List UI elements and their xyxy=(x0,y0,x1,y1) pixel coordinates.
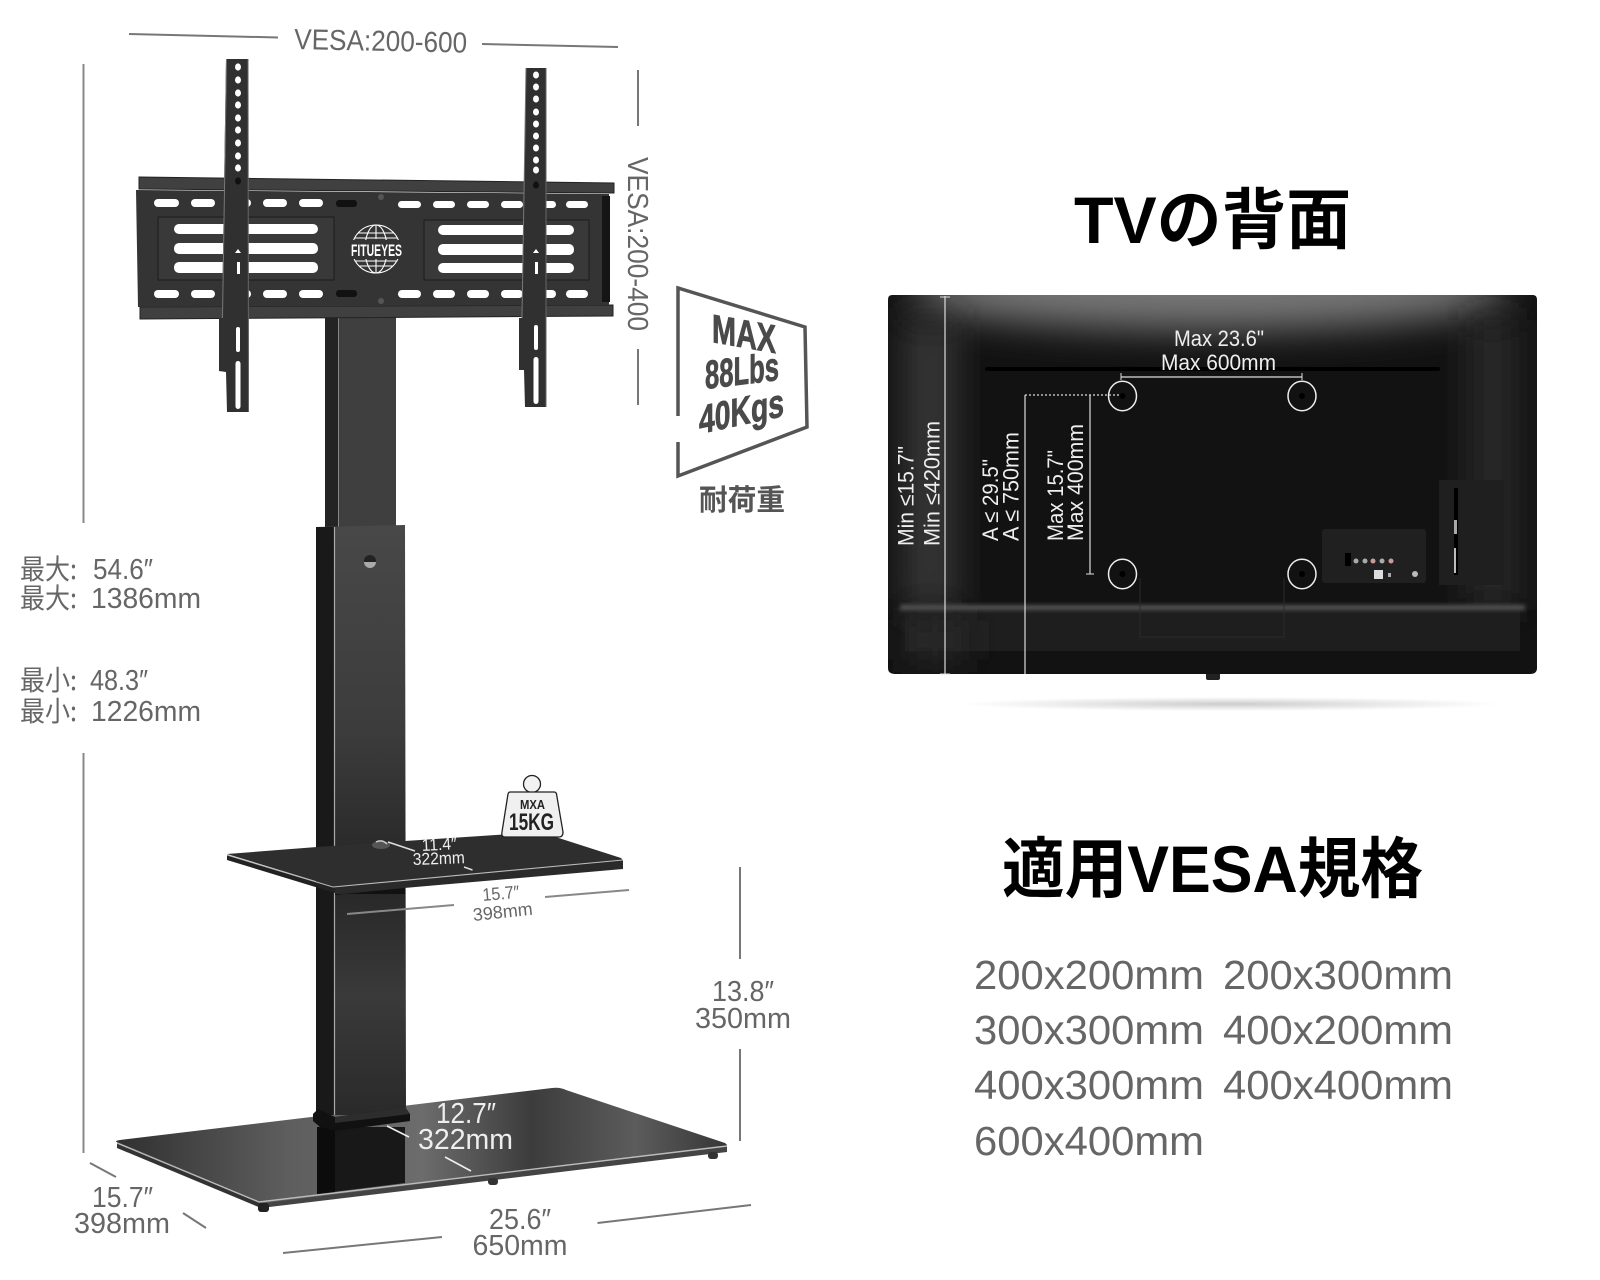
dimension: overall height: 1226mm xyxy=(91,696,201,728)
port panel xyxy=(1322,529,1426,583)
side connector panel xyxy=(1439,480,1504,585)
middle shelf xyxy=(227,832,623,895)
dimension: base side depth xyxy=(74,1163,206,1240)
shelf depth dimension xyxy=(388,834,472,870)
dimension: base to shelf height: 13.8″ xyxy=(712,976,774,1008)
distance to bottom edge A: A ≤ 29.5" xyxy=(978,459,1003,541)
VESA size list: 600x400mm xyxy=(974,1118,1204,1164)
TV mounting plate xyxy=(136,177,614,319)
distance to bottom edge A: A ≤ 750mm xyxy=(998,432,1024,541)
heading: back of TV: TVの背面 xyxy=(1074,167,1351,263)
VESA size list: 300x300mm xyxy=(974,1007,1204,1053)
dimension: overall height: 最大: xyxy=(20,548,77,588)
dimension: overall height: 54.6″ xyxy=(93,554,153,586)
dimension: base to shelf height xyxy=(695,867,791,1141)
VESA hole markers xyxy=(1108,381,1316,589)
VESA size list: 400x400mm xyxy=(1223,1062,1453,1108)
shelf depth dimension: 322mm xyxy=(412,848,465,869)
VESA size list: 200x200mm xyxy=(974,952,1204,998)
dimension: base width xyxy=(283,1204,751,1262)
dimension: top VESA width: VESA:200-600 xyxy=(294,24,467,60)
load capacity badge: 88Lbs xyxy=(705,344,779,398)
VESA size list: 200x300mm xyxy=(1223,952,1453,998)
shelf depth dimension: 11.4″ xyxy=(421,834,457,855)
FITUEYES logo: FITUEYES xyxy=(351,241,402,260)
dimension: base to shelf height: 350mm xyxy=(695,1003,791,1035)
VESA size list: 400x300mm xyxy=(974,1062,1204,1108)
vertical VESA max xyxy=(1043,395,1094,574)
dimension: base depth on glass: 12.7″ xyxy=(436,1098,496,1130)
dimension: overall height: 最大: xyxy=(20,577,77,617)
horizontal VESA max: Max 23.6" xyxy=(1174,326,1264,351)
shelf width dimension: 15.7″ xyxy=(482,882,521,905)
column reflection in glass xyxy=(317,1127,405,1194)
dimension: base width: 25.6″ xyxy=(489,1204,551,1236)
FITUEYES logo xyxy=(350,225,402,273)
dimension: overall height: 最小: xyxy=(20,690,77,730)
dimension: base side depth: 398mm xyxy=(74,1208,170,1240)
dimension: top VESA width xyxy=(129,24,618,60)
dimension: base depth on glass xyxy=(387,1098,513,1171)
dimension: base depth on glass: 322mm xyxy=(418,1124,513,1156)
shelf weight icon: 15KG xyxy=(509,809,554,836)
TV height line: Min ≤420mm xyxy=(920,421,944,546)
right VESA arm xyxy=(519,68,546,407)
column base collar xyxy=(313,1107,410,1131)
shelf weight icon xyxy=(502,776,563,837)
TV rear diagram xyxy=(888,254,1537,711)
distance to bottom edge A xyxy=(978,395,1121,674)
shelf width dimension xyxy=(347,882,629,925)
glass base xyxy=(116,1088,727,1212)
VESA size list xyxy=(974,952,1453,1164)
dimension: overall height: 最小: xyxy=(20,659,77,699)
dimension: overall height: 48.3″ xyxy=(90,665,148,697)
load capacity caption: 耐荷重 xyxy=(699,477,785,519)
dimension: side VESA height: VESA:200-400 xyxy=(621,157,653,331)
horizontal VESA max xyxy=(1121,326,1302,380)
load capacity badge xyxy=(678,288,807,476)
dimension: overall height: 1386mm xyxy=(91,583,201,615)
horizontal VESA max: Max 600mm xyxy=(1161,350,1276,375)
vertical VESA max: Max 15.7" xyxy=(1043,450,1068,541)
stand column xyxy=(316,316,406,1115)
VESA size list: 400x200mm xyxy=(1223,1007,1453,1053)
dimension: base width: 650mm xyxy=(472,1230,568,1262)
heading: compatible VESA sizes: 適用VESA規格 xyxy=(1002,816,1423,912)
shelf weight icon: MXA xyxy=(520,797,546,812)
lower cover panel xyxy=(1140,578,1284,637)
left VESA arm xyxy=(219,59,249,412)
shelf width dimension: 398mm xyxy=(472,899,534,925)
load capacity badge: MAX xyxy=(712,306,776,362)
load capacity badge: 40Kgs xyxy=(699,379,784,443)
vertical VESA max: Max 400mm xyxy=(1063,424,1088,541)
dimension: base side depth: 15.7″ xyxy=(92,1182,153,1214)
TV height line: Min ≤15.7" xyxy=(894,446,918,546)
TV height line xyxy=(894,296,950,674)
dimension: overall height xyxy=(20,64,201,1153)
